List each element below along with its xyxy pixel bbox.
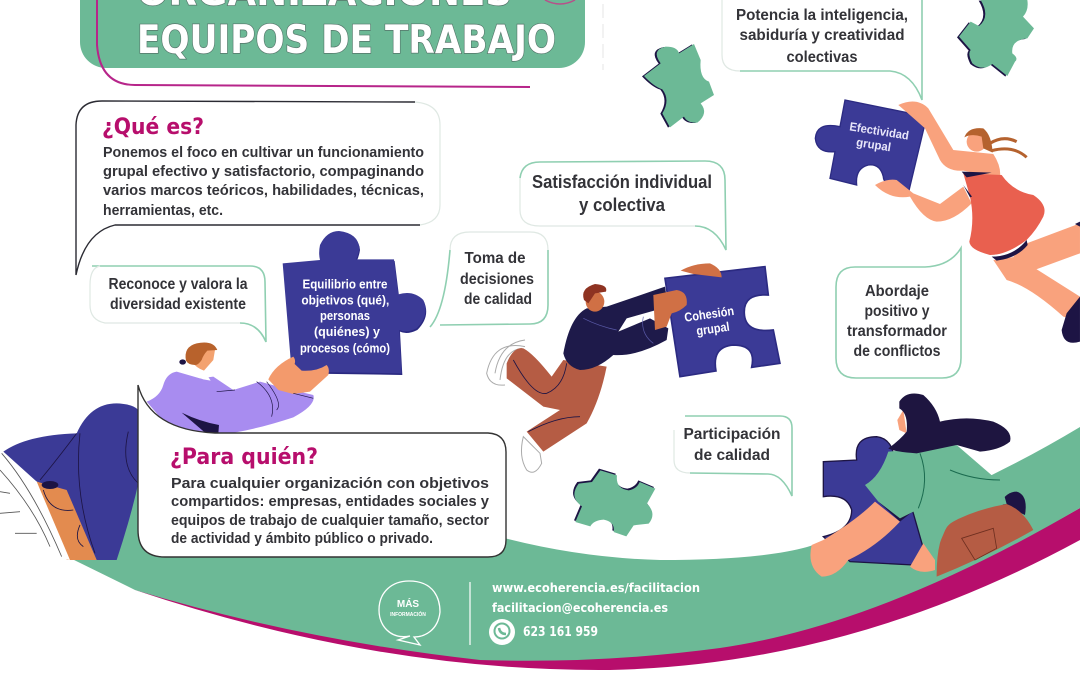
figure: woman at bottom right bbox=[810, 393, 1033, 577]
figure: man with cohesion puzzle bbox=[487, 263, 780, 472]
bubble: potencia: colectivas bbox=[786, 49, 858, 66]
bubble: abordaje bbox=[836, 248, 961, 378]
panel: para quién: de actividad y ámbito público o privado. bbox=[171, 531, 433, 547]
figure: person in purple holding puzzle bbox=[147, 342, 329, 437]
puzzle: green top right bbox=[957, 0, 1034, 77]
panel: qué es: herramientas, etc. bbox=[103, 203, 223, 219]
title banner: EQUIPOS DE TRABAJO bbox=[137, 18, 556, 63]
bubble: participación: Participación bbox=[684, 426, 780, 443]
footer: contact text: www.ecoherencia.es/facilitacion bbox=[492, 581, 700, 595]
figure: woman with efectividad puzzle: grupal bbox=[855, 135, 892, 154]
bubble: toma de decisiones: de calidad bbox=[464, 291, 532, 308]
panel: para quién: compartidos: empresas, entidades sociales y bbox=[171, 494, 489, 510]
bubble: satisfacción: Satisfacción individual bbox=[532, 172, 712, 192]
figure: woman with efectividad puzzle: Efectividad bbox=[848, 119, 910, 143]
figure: woman with efectividad puzzle bbox=[815, 100, 1080, 343]
figure: man with cohesion puzzle: Cohesión bbox=[683, 304, 735, 325]
bubble: participación bbox=[674, 416, 792, 496]
bubble: diversidad bbox=[90, 266, 266, 342]
figure: man with cohesion puzzle: grupal bbox=[695, 320, 730, 338]
bubble: toma de decisiones: Toma de bbox=[464, 250, 526, 267]
figure: person in hood at left bbox=[0, 403, 138, 560]
bubble: participación: de calidad bbox=[694, 447, 770, 464]
bubble: toma de decisiones: decisiones bbox=[460, 271, 534, 288]
footer: más información bubble: INFORMACIÓN bbox=[390, 610, 426, 618]
puzzle: green top bbox=[642, 44, 714, 128]
footer: contact text: facilitacion@ecoherencia.es bbox=[492, 601, 668, 615]
bubble: satisfacción bbox=[520, 161, 726, 250]
bubble: satisfacción: y colectiva bbox=[579, 195, 666, 215]
panel: qué es: varios marcos teóricos, habilidades, técnicas, bbox=[103, 183, 424, 199]
panel: qué es: Ponemos el foco en cultivar un funcionamiento bbox=[103, 145, 424, 161]
footer: más información bubble bbox=[379, 581, 440, 645]
puzzle: equilibrio: objetivos (qué), bbox=[301, 293, 389, 307]
panel: para quién: ¿Para quién? bbox=[170, 445, 318, 470]
footer: más información bubble: MÁS bbox=[397, 597, 419, 610]
panel: para quién: equipos de trabajo de cualquier tamaño, sector bbox=[171, 513, 489, 529]
bubble: abordaje: positivo y bbox=[864, 303, 930, 320]
bubble: potencia: sabiduría y creatividad bbox=[740, 27, 904, 44]
title banner bbox=[80, 0, 603, 87]
bubble: diversidad: diversidad existente bbox=[110, 296, 246, 313]
panel: para quién bbox=[138, 385, 506, 557]
puzzle: equilibrio: Equilibrio entre bbox=[302, 277, 387, 291]
bubble: abordaje: transformador bbox=[847, 323, 947, 340]
icon: whatsapp bbox=[489, 619, 515, 645]
background wave: green ground bbox=[70, 427, 1080, 661]
bubble: toma de decisiones bbox=[430, 232, 548, 327]
bubble: diversidad: Reconoce y valora la bbox=[108, 276, 248, 293]
panel: qué es: ¿Qué es? bbox=[102, 115, 204, 140]
puzzle: equilibrio: personas bbox=[320, 309, 370, 323]
panel: qué es bbox=[76, 101, 440, 275]
puzzle: green bottom bbox=[573, 469, 655, 536]
bubble: abordaje: de conflictos bbox=[854, 343, 940, 360]
panel: qué es: grupal efectivo y satisfactorio, compaginando bbox=[103, 164, 424, 180]
puzzle: equilibrio bbox=[283, 231, 426, 375]
bubble: abordaje: Abordaje bbox=[865, 283, 929, 300]
bubble: potencia: Potencia la inteligencia, bbox=[736, 7, 908, 24]
footer divider bbox=[469, 582, 471, 645]
background wave: magenta band bbox=[135, 508, 1080, 670]
puzzle: equilibrio: procesos (cómo) bbox=[300, 341, 390, 355]
panel: para quién: Para cualquier organización con objetivos bbox=[171, 476, 489, 492]
footer: contact text: 623 161 959 bbox=[523, 625, 598, 640]
puzzle: equilibrio: (quiénes) y bbox=[314, 325, 380, 339]
bubble: potencia bbox=[722, 0, 922, 100]
footer: contact text bbox=[492, 581, 700, 640]
